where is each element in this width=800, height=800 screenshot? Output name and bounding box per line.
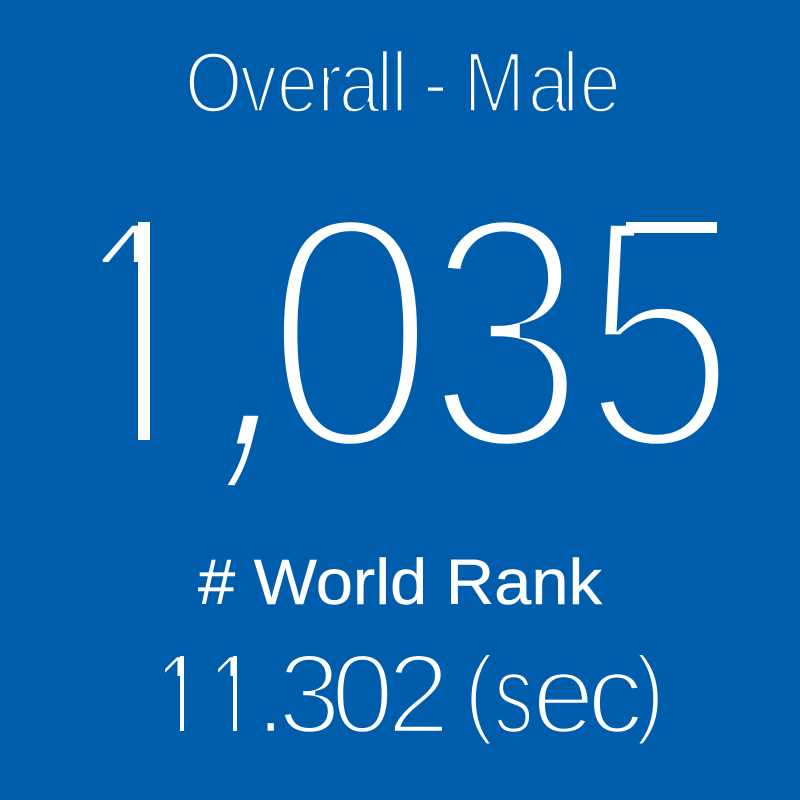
big number: 0 [265, 146, 436, 520]
big number [79, 146, 736, 520]
title: Overall - Male [185, 34, 621, 130]
big number: 3 [426, 147, 586, 520]
time value: ( [464, 636, 494, 747]
time value: 1 [156, 631, 200, 757]
big number: 5 [582, 147, 736, 520]
time value: 1 [209, 631, 253, 757]
time value [150, 631, 665, 757]
big number: 1 [79, 147, 190, 520]
time value: ec [532, 631, 644, 757]
metric label: # World Rank [198, 546, 603, 618]
big number: , [198, 153, 344, 516]
time value: ) [635, 636, 665, 747]
time value: s [494, 631, 534, 757]
time value: .302 [255, 631, 450, 757]
